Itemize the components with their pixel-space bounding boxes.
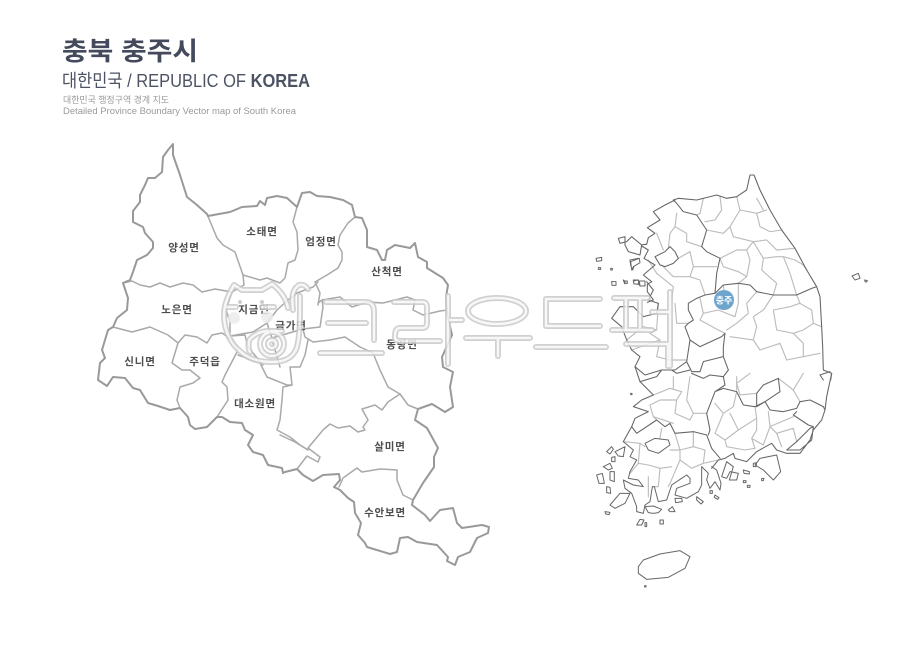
district labels: 신니면 xyxy=(124,355,156,368)
internal municipal boundaries south xyxy=(625,373,803,497)
district labels: 노은면 xyxy=(161,304,193,316)
subtitle: 대한민국 / REPUBLIC OF KOREA xyxy=(62,71,310,91)
map: South Korea xyxy=(596,175,867,587)
district labels xyxy=(124,225,418,519)
district labels: 산척면 xyxy=(371,265,403,278)
title: 충북 충주시 xyxy=(62,38,198,66)
district labels: 살미면 xyxy=(374,440,406,453)
district labels: 소태면 xyxy=(246,225,278,238)
outer boundary xyxy=(98,144,489,565)
marker label: 충주 xyxy=(716,296,732,306)
district labels: 엄정면 xyxy=(305,235,337,248)
district boundaries xyxy=(113,207,447,500)
watermark cat cheeks and eyes xyxy=(228,300,273,324)
marker circle xyxy=(714,290,734,310)
watermark xyxy=(224,284,670,366)
district labels: 동량면 xyxy=(386,338,418,351)
description English: Detailed Province Boundary Vector map of South Korea xyxy=(63,106,297,117)
district labels: 금가면 xyxy=(275,319,307,332)
province boundaries south xyxy=(623,367,832,468)
southeast islands xyxy=(631,393,781,587)
internal municipal boundaries north xyxy=(627,197,822,360)
watermark inner highlight xyxy=(224,284,670,366)
district labels: 주덕읍 xyxy=(189,356,221,368)
map: Chungju districts xyxy=(98,144,489,565)
district labels: 수안보면 xyxy=(364,507,406,519)
district labels: 양성면 xyxy=(168,241,200,254)
province boundaries and coastline north xyxy=(612,175,832,380)
eastern and northwest-sea islands xyxy=(596,257,867,286)
header block xyxy=(62,38,310,117)
southwest coast and islands xyxy=(597,438,721,527)
Seoul and northwest coast xyxy=(612,200,678,302)
marker: Chungju location xyxy=(714,290,734,310)
watermark strokes xyxy=(224,284,670,366)
district labels: 지금면 xyxy=(238,304,270,316)
description Korean: 대한민국 행정구역 경계 지도 xyxy=(63,94,169,105)
district labels: 대소원면 xyxy=(234,397,276,410)
